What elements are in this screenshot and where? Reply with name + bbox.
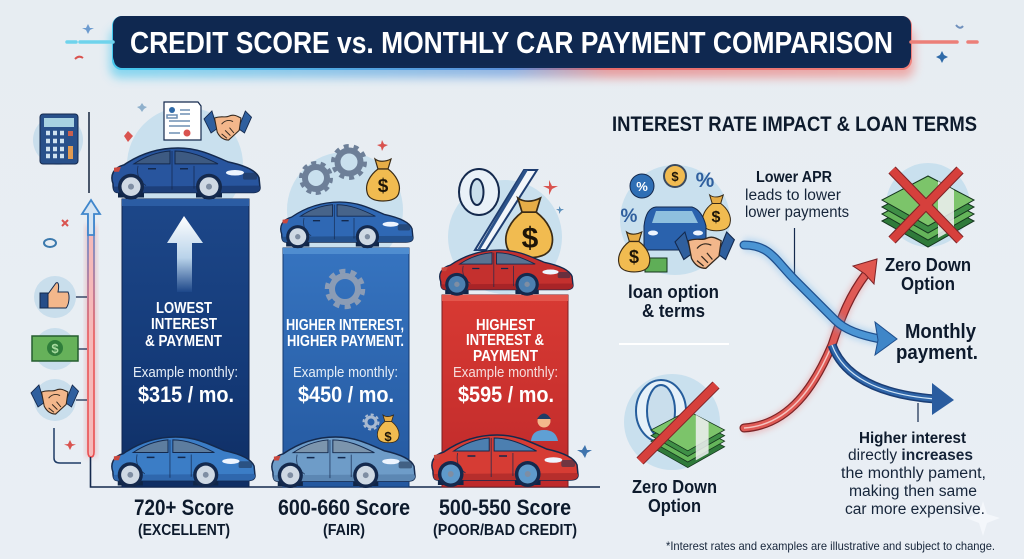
callout: lower APR: leads to lower — [745, 187, 841, 204]
label: 500-550 score — [433, 495, 577, 539]
title banner — [67, 16, 977, 78]
car: excellent bottom — [112, 437, 255, 487]
label: monthly payment: payment. — [896, 342, 978, 364]
label: 720+ score — [134, 495, 234, 539]
panel: fair bar: HIGHER PAYMENT. — [287, 333, 404, 350]
callout: lower APR — [745, 169, 849, 277]
icon: calculator — [33, 114, 83, 165]
label: 500-550 score: (POOR/BAD CREDIT) — [433, 522, 577, 539]
label: monthly payment — [896, 321, 978, 364]
panel: fair bar: $ — [384, 429, 392, 444]
icon: dollar bill: $ — [51, 341, 59, 356]
icon: loan options: % — [696, 169, 715, 192]
icon: loan options: $ — [671, 169, 679, 184]
title banner: CREDIT SCORE vs. MONTHLY CAR PAYMENT COMPARISON — [130, 25, 893, 60]
panel: excellent bar: $315 / mo. — [138, 382, 234, 407]
panel: excellent bar — [122, 199, 249, 487]
label: zero down top — [885, 255, 971, 294]
label: zero down top: Option — [901, 274, 955, 294]
icon group: top of poor bar: $ — [522, 222, 539, 255]
callout: higher interest: car more expensive. — [845, 501, 985, 518]
panel: excellent bar: LOWEST — [156, 300, 212, 317]
arrow: blue monthly — [744, 245, 897, 355]
icon: handshake left — [31, 379, 79, 421]
icon: loan options: % — [636, 179, 648, 194]
icon: loan options: % — [621, 206, 638, 227]
icon group: top of fair bar — [287, 146, 403, 268]
label: zero down bottom: Zero Down — [632, 477, 717, 497]
panel: poor bar: Example monthly: — [453, 365, 558, 381]
panel: poor bar: INTEREST & — [466, 332, 544, 349]
label: 720+ score: (EXCELLENT) — [138, 522, 230, 539]
icon group: top of poor bar — [448, 169, 562, 294]
left axis arrow — [54, 112, 600, 487]
icon: thumbs up — [34, 276, 76, 318]
callout: higher interest: making then same — [849, 483, 977, 500]
panel: poor bar — [442, 295, 568, 487]
car: fair bottom — [272, 437, 415, 488]
panel: poor bar: PAYMENT — [473, 348, 538, 365]
panel: excellent bar: Example monthly: — [133, 365, 238, 381]
label: zero down bottom — [632, 477, 717, 516]
panel: excellent bar: & PAYMENT — [145, 333, 222, 350]
icon: loan options: loan option — [628, 282, 719, 302]
label: 600-660 score — [278, 495, 410, 539]
section heading: INTEREST RATE IMPACT & LOAN TERMS — [612, 113, 977, 136]
panel: poor bar: $595 / mo. — [458, 382, 554, 407]
panel: fair bar: $450 / mo. — [298, 382, 394, 407]
callout: higher interest: the monthly pament, — [841, 465, 986, 482]
label: 720+ score: 720+ Score — [134, 495, 234, 520]
icon: loan options: $ — [629, 247, 639, 267]
callout: higher interest — [841, 430, 986, 518]
panel: fair bar: Example monthly: — [293, 365, 398, 381]
callout: lower APR: lower payments — [745, 204, 849, 221]
label: monthly payment: Monthly — [905, 321, 977, 343]
footnote: *Interest rates and examples are illustrative and subject to change. — [666, 539, 995, 553]
panel: fair bar — [283, 248, 409, 487]
icon: loan options: & terms — [642, 301, 705, 321]
car: fair top — [281, 202, 413, 248]
icon: zero down crossed money — [882, 163, 974, 247]
label: 500-550 score: 500-550 Score — [439, 495, 571, 520]
icon group: top of excellent bar — [127, 102, 252, 223]
label: 600-660 score: 600-660 Score — [278, 495, 410, 520]
callout: higher interest: Higher interest — [859, 430, 966, 447]
icon: dollar bill — [32, 328, 78, 370]
divider — [619, 343, 729, 345]
car: excellent top — [112, 148, 260, 199]
arrow: dark blue to higher interest — [832, 345, 954, 422]
panel: poor bar: HIGHEST — [476, 317, 535, 334]
callout: higher interest: directly increases — [848, 447, 973, 464]
car: poor bottom — [432, 435, 578, 487]
panel: excellent bar: INTEREST — [151, 316, 217, 333]
icon: loan options: $ — [712, 209, 721, 226]
label: zero down bottom: Option — [648, 496, 701, 516]
arrow: red rising — [744, 259, 877, 430]
car: poor top — [440, 250, 573, 296]
icon group: top of fair bar: $ — [378, 176, 389, 197]
icon: loan options — [619, 165, 734, 321]
label: zero down top: Zero Down — [885, 255, 971, 275]
label: 600-660 score: (FAIR) — [323, 522, 365, 539]
panel: fair bar: HIGHER INTEREST, — [286, 317, 404, 334]
icon: zero with crossed money — [624, 374, 725, 470]
callout: lower APR: Lower APR — [756, 169, 832, 186]
